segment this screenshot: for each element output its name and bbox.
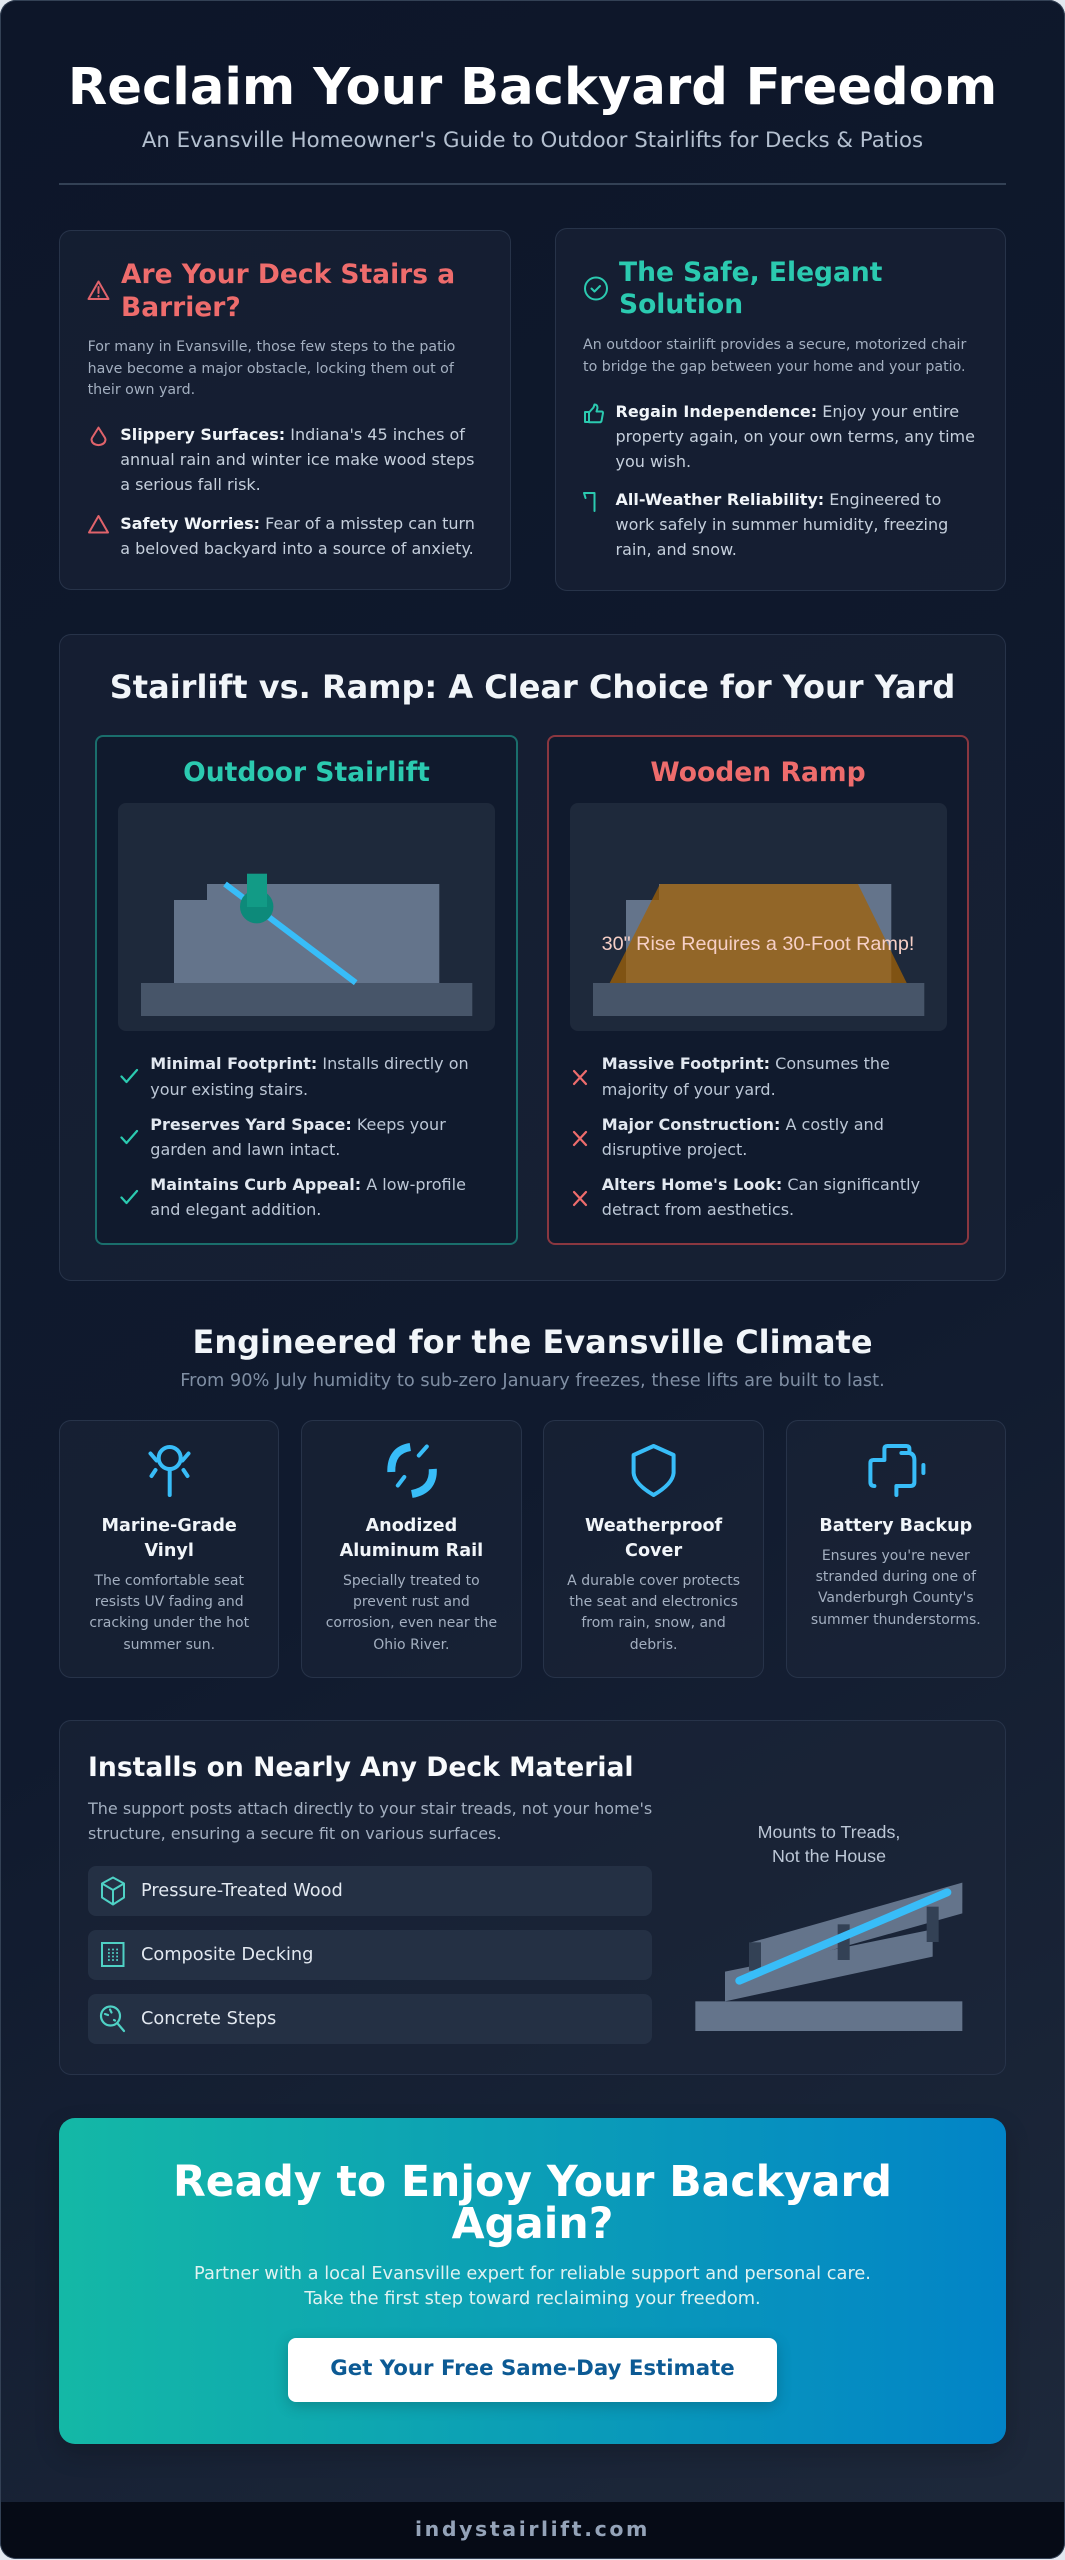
list item: all-weather reliability <box>583 490 948 559</box>
material row: composite decking <box>88 1930 652 1980</box>
text: slippery surfaces <box>120 425 474 494</box>
text: marine-grade vinyl: summer sun. <box>123 1637 215 1653</box>
text: major construction: Major Construction: A costly and <box>602 1115 884 1134</box>
text: regain independence: you wish. <box>616 452 691 470</box>
text: problem intro: their own yard. <box>88 382 195 398</box>
icon: triangle <box>88 515 109 534</box>
panel: solution <box>554 228 1006 591</box>
heading: solution: The Safe, Elegant <box>619 256 882 288</box>
title: Reclaim Your Backyard Freedom <box>68 56 997 116</box>
heading: climate: Engineered for the Evansville Climate <box>192 1323 873 1361</box>
text: all-weather reliability <box>616 490 948 559</box>
button: free estimate <box>288 2338 777 2402</box>
text: battery backup <box>786 1546 1006 1631</box>
icon: cube <box>100 1876 126 1906</box>
title: marine-grade vinyl: Vinyl <box>144 1540 194 1560</box>
text: slippery surfaces: a serious fall risk. <box>120 475 261 494</box>
text: weatherproof cover: A durable cover protects <box>567 1573 740 1589</box>
text: preserves yard space <box>150 1115 446 1159</box>
text: marine-grade vinyl: resists UV fading and <box>95 1594 244 1610</box>
text: alters home's look: Alters Home's Look: Can significantly <box>602 1175 920 1194</box>
heading: comparison: Stairlift vs. Ramp: A Clear Choice for Your Yard <box>110 668 955 706</box>
text: safety worries: a beloved backyard into a source of anxiety. <box>120 539 474 558</box>
text: major construction: disruptive project. <box>602 1140 747 1159</box>
icon: marine vinyl <box>148 1445 191 1497</box>
text: solution intro <box>583 337 966 374</box>
text: regain independence <box>616 402 975 470</box>
panel: wooden ramp <box>547 735 969 1245</box>
text: minimal footprint <box>150 1054 469 1099</box>
text: slippery surfaces: annual rain and winter ice make wood steps <box>120 450 474 469</box>
heading: solution <box>619 256 882 320</box>
text: weatherproof cover: the seat and electronics <box>569 1594 738 1610</box>
icon: water drop <box>90 426 106 446</box>
text: major construction <box>602 1115 884 1159</box>
title: weatherproof cover: Weatherproof <box>585 1516 722 1536</box>
text: deck materials intro <box>88 1796 652 1846</box>
text: weatherproof cover: debris. <box>630 1637 677 1653</box>
panel: call to action <box>59 2118 1006 2444</box>
icon: weather flag <box>583 492 596 512</box>
text: deck materials intro: structure, ensuring a secure fit on various surfaces. <box>88 1824 501 1842</box>
title: battery backup: Battery Backup <box>819 1516 972 1536</box>
icon: cross <box>572 1190 588 1206</box>
text: massive footprint <box>602 1054 890 1099</box>
heading: wooden ramp: Wooden Ramp <box>650 757 866 788</box>
text: problem intro <box>88 339 455 398</box>
text: problem intro: For many in Evansville, those few steps to the patio <box>88 339 455 355</box>
text: weatherproof cover: from rain, snow, and <box>581 1615 726 1631</box>
list item: massive footprint <box>572 1054 890 1099</box>
subtitle: An Evansville Homeowner's Guide to Outdoor Stairlifts for Decks & Patios <box>142 128 923 152</box>
icon: check <box>120 1130 138 1144</box>
text: all-weather reliability: All-Weather Reliability: Engineered to <box>616 490 941 509</box>
panel: outdoor stairlift <box>95 735 518 1245</box>
text: alters home's look: detract from aesthetics. <box>602 1200 794 1219</box>
heading: call to action: Again? <box>452 2199 613 2249</box>
text: deck materials intro: The support posts attach directly to your stair treads, not your home's <box>88 1798 652 1818</box>
text: battery backup: summer thunderstorms. <box>811 1612 981 1628</box>
text: preserves yard space: garden and lawn intact. <box>150 1140 340 1159</box>
list item: maintains curb appeal <box>120 1175 466 1219</box>
text: anodized aluminum rail: prevent rust and <box>353 1594 470 1610</box>
label: concrete steps: Concrete Steps <box>141 2009 276 2029</box>
heading: solution: Solution <box>619 289 743 320</box>
text: marine-grade vinyl: cracking under the hot <box>89 1615 249 1631</box>
icon: magnifier <box>100 2004 126 2034</box>
heading: problem: Are Your Deck Stairs a <box>121 259 455 290</box>
label: pressure-treated wood: Pressure-Treated Wood <box>141 1881 343 1901</box>
diagram: long ramp over stairs <box>570 803 947 1031</box>
text: safety worries <box>120 514 475 558</box>
text: anodized aluminum rail: corrosion, even near the <box>326 1615 497 1631</box>
heading: deck materials: Installs on Nearly Any Deck Material <box>88 1752 634 1783</box>
text: marine-grade vinyl: The comfortable seat <box>94 1573 244 1589</box>
list item: preserves yard space <box>120 1115 446 1159</box>
text: weatherproof cover <box>543 1571 764 1656</box>
icon: battery backup <box>866 1440 926 1500</box>
subheading: climate: From 90% July humidity to sub-zero January freezes, these lifts are built to last. <box>180 1370 885 1391</box>
text: solution intro: An outdoor stairlift provides a secure, motorized chair <box>583 337 966 353</box>
icon: thumbs up <box>584 404 604 424</box>
text: battery backup: Ensures you're never <box>822 1548 970 1564</box>
footer: indystairlift.com <box>415 2517 650 2541</box>
list item: alters home's look <box>572 1175 920 1219</box>
heading: problem <box>121 259 455 323</box>
title: weatherproof cover: Cover <box>625 1540 682 1560</box>
text: massive footprint: Massive Footprint: Consumes the <box>602 1054 890 1073</box>
text: marine-grade vinyl <box>59 1571 279 1656</box>
text: battery backup: Vanderburgh County's <box>818 1590 974 1606</box>
text: regain independence: Regain Independence: Enjoy your entire <box>616 402 959 420</box>
icon: cross <box>572 1070 588 1086</box>
text: minimal footprint: your existing stairs. <box>150 1080 308 1099</box>
text: safety worries: Safety Worries: Fear of a misstep can turn <box>120 514 475 533</box>
panel: battery backup <box>786 1420 1006 1678</box>
diagram: rail mounted to treads <box>680 1800 980 2060</box>
diagram: rail mounted to treads: Mounts to Treads, <box>758 1822 900 1842</box>
material row: concrete steps <box>88 1994 652 2044</box>
text: call to action <box>59 2260 1006 2310</box>
text: call to action: Take the first step toward reclaiming your freedom. <box>304 2288 761 2308</box>
text: call to action: Partner with a local Evansville expert for reliable support and personal care. <box>194 2262 871 2284</box>
heading: problem: Barrier? <box>121 292 241 323</box>
icon: shield <box>624 1440 684 1500</box>
text: minimal footprint: Minimal Footprint: Installs directly on <box>150 1054 469 1073</box>
footer <box>1 2502 1064 2558</box>
title: anodized aluminum rail: Anodized <box>366 1516 457 1536</box>
text: all-weather reliability: work safely in summer humidity, freezing <box>616 515 948 534</box>
list item: slippery surfaces <box>90 425 474 494</box>
label: composite decking: Composite Decking <box>141 1945 313 1965</box>
text: battery backup: stranded during one of <box>816 1569 976 1585</box>
panel: anodized aluminum rail <box>301 1420 522 1678</box>
text: solution intro: to bridge the gap between your home and your patio. <box>583 358 966 374</box>
icon: cross <box>572 1130 588 1146</box>
text: maintains curb appeal: and elegant addition. <box>150 1200 321 1219</box>
panel: problem <box>59 230 510 590</box>
text: regain independence: property again, on your own terms, any time <box>616 426 975 446</box>
heading: outdoor stairlift: Outdoor Stairlift <box>183 757 430 788</box>
text: preserves yard space: Preserves Yard Space: Keeps your <box>150 1115 446 1134</box>
title: weatherproof cover <box>543 1514 764 1564</box>
title: anodized aluminum rail <box>301 1514 522 1564</box>
list item: major construction <box>572 1115 884 1159</box>
panel: marine-grade vinyl <box>59 1420 279 1678</box>
title: anodized aluminum rail: Aluminum Rail <box>340 1540 483 1560</box>
text: all-weather reliability: rain, and snow. <box>616 540 737 559</box>
panel: stairlift vs ramp <box>59 634 1006 1281</box>
panel: weatherproof cover <box>543 1420 764 1678</box>
list item: minimal footprint <box>120 1054 469 1099</box>
list item: safety worries <box>88 514 475 558</box>
icon: check <box>120 1068 138 1084</box>
text: massive footprint: majority of your yard. <box>602 1080 776 1099</box>
title: marine-grade vinyl: Marine-Grade <box>102 1516 237 1536</box>
button: free estimate: Get Your Free Same-Day Estimate <box>330 2356 735 2381</box>
heading: call to action: Ready to Enjoy Your Backyard <box>173 2157 892 2207</box>
icon: check <box>120 1190 138 1204</box>
text: maintains curb appeal <box>150 1175 466 1219</box>
title: marine-grade vinyl <box>102 1516 237 1560</box>
text: slippery surfaces: Slippery Surfaces: Indiana's 45 inches of <box>120 425 465 444</box>
list item: regain independence <box>584 402 975 470</box>
icon: check circle <box>584 276 608 300</box>
material row: pressure-treated wood <box>88 1866 652 1916</box>
text: maintains curb appeal: Maintains Curb Appeal: A low-profile <box>150 1175 466 1194</box>
icon: anodized rail <box>381 1440 441 1500</box>
diagram: long ramp over stairs: 30" Rise Requires a 30-Foot Ramp! <box>602 933 914 955</box>
icon: warning triangle <box>88 280 110 300</box>
diagram: stairlift on stairs <box>118 803 495 1031</box>
icon: grid <box>100 1940 126 1970</box>
text: anodized aluminum rail <box>301 1571 522 1656</box>
panel: deck materials <box>59 1720 1006 2075</box>
text: problem intro: have become a major obstacle, locking them out of <box>88 360 454 376</box>
text: anodized aluminum rail: Specially treated to <box>343 1573 480 1589</box>
text: anodized aluminum rail: Ohio River. <box>373 1637 450 1653</box>
text: alters home's look <box>602 1175 920 1219</box>
diagram: rail mounted to treads: Not the House <box>772 1846 886 1866</box>
heading: call to action <box>59 2161 1006 2246</box>
